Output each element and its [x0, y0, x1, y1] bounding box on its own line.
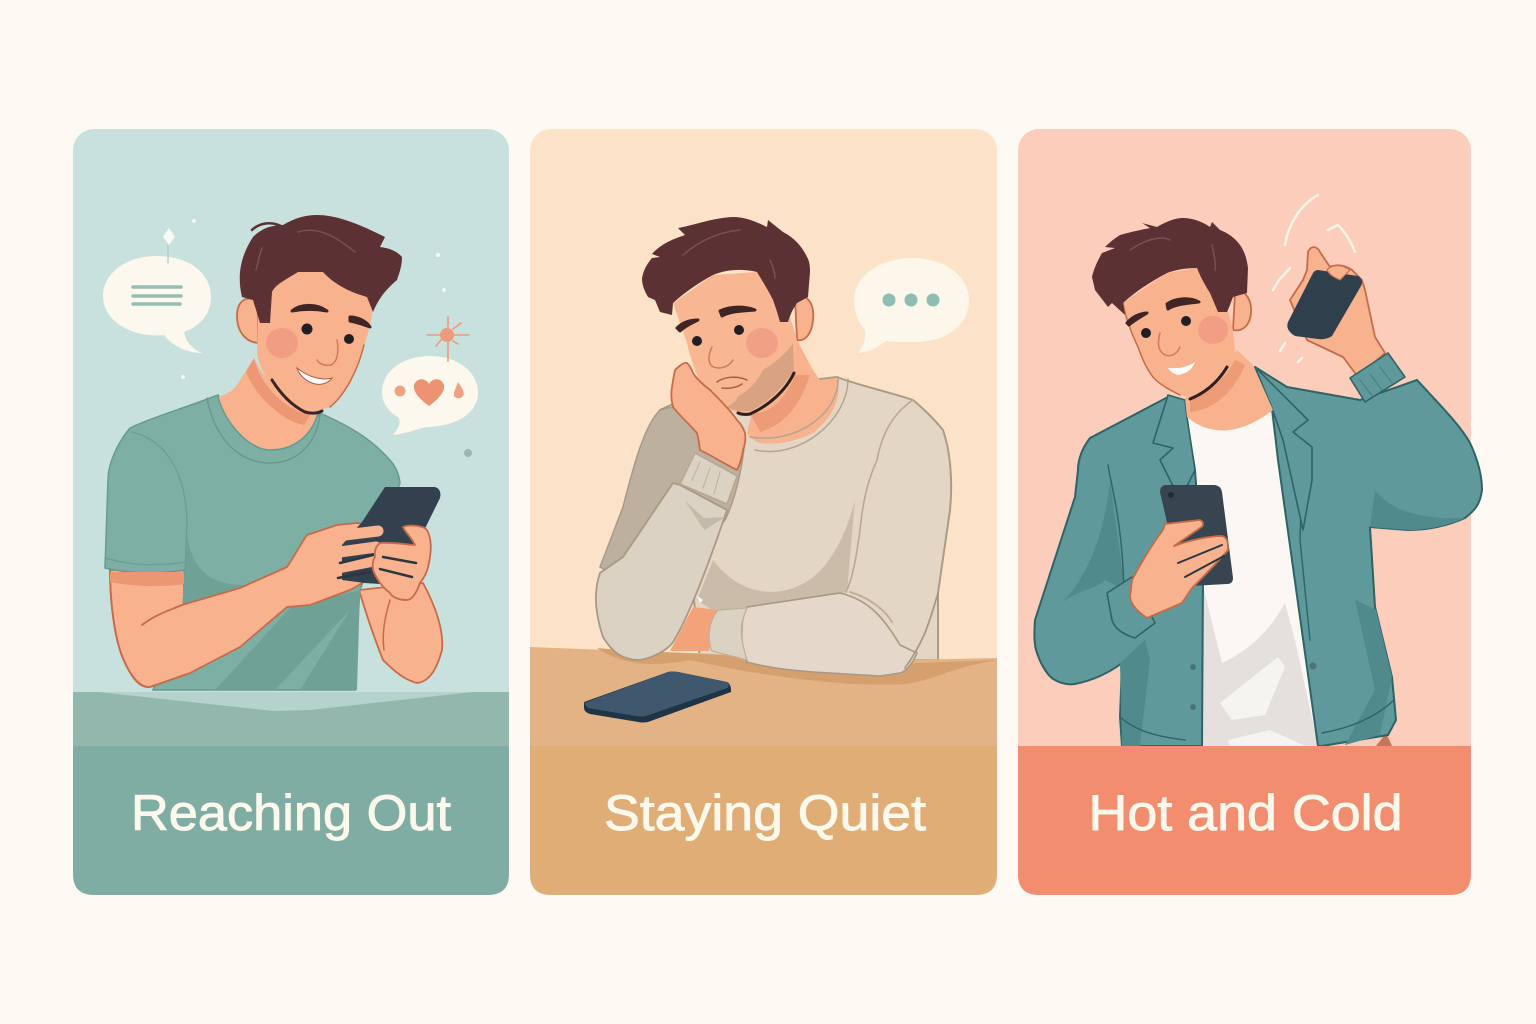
right arm edge	[905, 593, 938, 668]
smile	[1168, 362, 1195, 375]
phone	[342, 487, 440, 585]
cheek	[1198, 316, 1228, 344]
upper arm	[110, 570, 184, 687]
label: Hot and Cold: Hot and Cold	[1088, 785, 1402, 841]
buttons	[1190, 662, 1316, 710]
shirt folds	[1203, 590, 1318, 746]
jacket body right	[1255, 367, 1482, 746]
hair highlights	[683, 230, 775, 278]
label band	[530, 746, 997, 895]
eyes	[692, 336, 702, 346]
pink waist glimpse	[1376, 733, 1392, 746]
nose and mouth	[709, 347, 733, 368]
raised cuff	[1350, 353, 1405, 402]
lower hand	[1130, 520, 1228, 618]
panel background	[530, 129, 997, 895]
panel: Hot and Cold	[1018, 129, 1482, 895]
right hand	[373, 526, 431, 600]
cuff raised	[680, 453, 737, 504]
eyes	[1141, 328, 1151, 338]
eyebrows	[1127, 299, 1199, 325]
lower left hand	[670, 607, 718, 651]
icon: coral spark	[427, 317, 469, 361]
jaw line	[272, 380, 322, 413]
lower phone	[1160, 485, 1233, 586]
hair	[240, 215, 402, 323]
jacket seams	[1108, 465, 1394, 740]
panel: Staying Quiet	[530, 129, 997, 895]
t-shirt	[105, 395, 400, 690]
face	[257, 262, 374, 411]
phone on table	[584, 672, 731, 722]
face	[673, 272, 797, 413]
sleeve seam and hem	[106, 432, 187, 570]
left forearm	[596, 483, 727, 660]
label band	[1018, 746, 1471, 895]
table highlight	[98, 692, 473, 711]
eyes	[302, 324, 312, 334]
eyebrows	[677, 307, 755, 331]
left fingers	[338, 531, 378, 568]
table shadow	[597, 648, 997, 685]
smile	[297, 368, 332, 384]
panel: Reaching Out	[73, 129, 509, 895]
motion lines	[1273, 195, 1355, 362]
sweater body	[640, 377, 951, 660]
ear	[237, 298, 258, 343]
cuff resting	[709, 608, 747, 660]
right lapel	[1255, 367, 1312, 530]
nose	[317, 340, 338, 365]
face	[1123, 268, 1235, 398]
collar	[750, 378, 848, 452]
figure: man holding phones	[1034, 218, 1482, 746]
jaw line	[1190, 367, 1227, 399]
hair	[1092, 218, 1248, 315]
panel background	[73, 129, 509, 895]
collar	[207, 397, 320, 463]
neck	[1185, 350, 1273, 430]
shirt shadows	[182, 535, 360, 690]
neck	[218, 358, 318, 450]
cheek	[266, 328, 298, 358]
hair wisp and highlights	[252, 223, 283, 230]
sleeve seam	[846, 400, 913, 592]
icon: grey dot	[464, 449, 472, 457]
jacket shading	[1060, 480, 1465, 746]
figure: man texting on phone	[105, 215, 442, 690]
jacket body left	[1034, 397, 1203, 746]
speech bubble: text lines	[103, 256, 211, 353]
white t-shirt	[1187, 408, 1318, 746]
ear	[795, 296, 813, 340]
lower cuff	[1107, 577, 1155, 638]
cheek	[746, 328, 778, 358]
sweater shaded left	[600, 406, 745, 600]
lower body shade	[697, 500, 855, 612]
label: Staying Quiet: Staying Quiet	[604, 785, 926, 841]
left lapel	[1153, 395, 1195, 500]
raised hand	[1290, 247, 1385, 377]
sleeve skin shadow	[110, 572, 184, 586]
hair highlights	[1130, 238, 1215, 270]
icon: sparkle star	[163, 228, 175, 263]
eyebrows	[292, 305, 370, 327]
icon: small dots	[181, 219, 446, 379]
neck	[747, 340, 839, 444]
speech bubble: ellipsis	[854, 258, 969, 353]
right forearm	[359, 583, 442, 683]
table band	[73, 692, 509, 746]
table	[530, 647, 997, 746]
ear	[1233, 292, 1251, 330]
raised fingertips	[1327, 266, 1350, 280]
raised phone	[1287, 270, 1362, 339]
right forearm	[742, 593, 917, 676]
figure: man resting head, waiting	[530, 217, 997, 746]
stubble	[727, 343, 794, 411]
nose	[1158, 333, 1180, 356]
panel background	[1018, 129, 1471, 895]
hair	[642, 217, 810, 322]
forearm and left hand	[120, 523, 380, 687]
jaw line	[738, 373, 794, 414]
speech bubble: heart	[382, 356, 478, 435]
label band	[73, 746, 509, 895]
label: Reaching Out: Reaching Out	[131, 785, 451, 841]
hand on cheek	[671, 363, 745, 470]
